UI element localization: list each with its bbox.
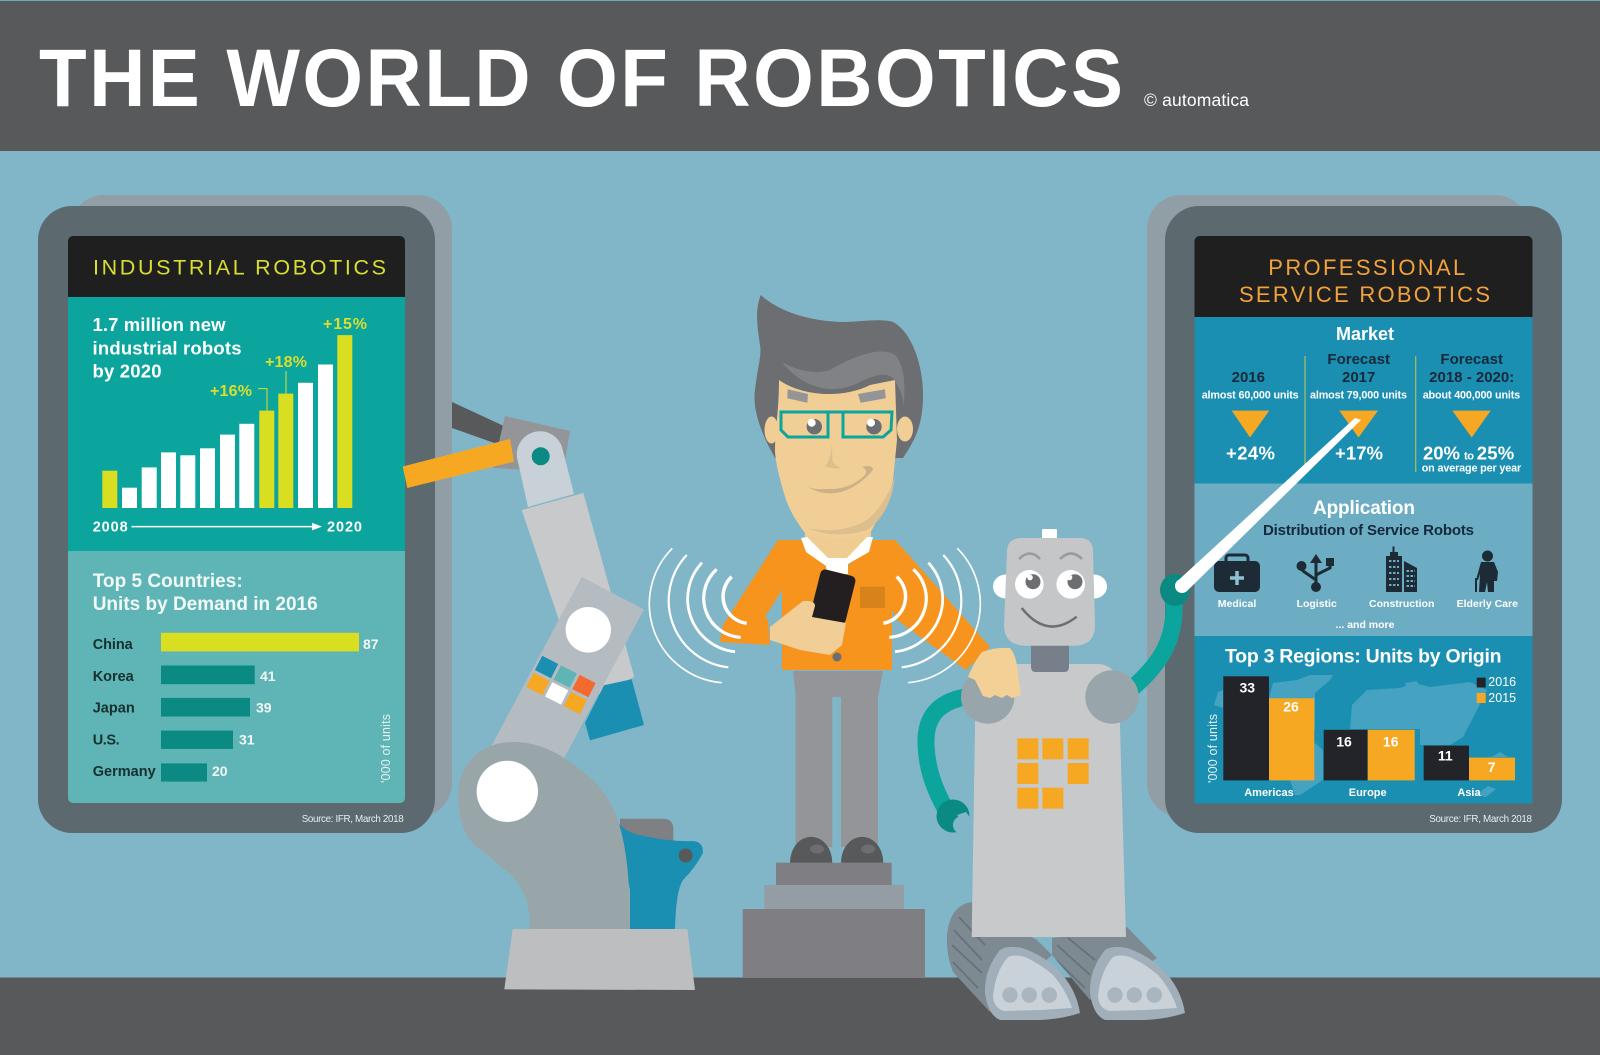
- title: THE WORLD OF ROBOTICS: [39, 32, 1123, 123]
- section: application: ... and more: [1336, 619, 1395, 631]
- section: market: Market: [1336, 324, 1394, 344]
- screen header: [68, 236, 405, 297]
- bar chart: regions: Asia: [1457, 787, 1481, 799]
- bar chart: regions: 7: [1488, 759, 1496, 775]
- right arm: [1130, 600, 1174, 690]
- icon: usb logistic: [1296, 554, 1334, 592]
- section: top 3 regions: Top 3 Regions: Units by Origin: [1225, 646, 1502, 668]
- illustration: industrial robot arm: [403, 402, 703, 990]
- floor band: [0, 978, 1600, 1055]
- shoes: [790, 837, 883, 863]
- section: top 5 countries: Germany: [93, 764, 156, 780]
- bar chart: regions: 33: [1240, 680, 1255, 696]
- section: growth chart: +18%: [265, 354, 307, 371]
- section: market: on average per year: [1422, 462, 1522, 474]
- section: application: Construction: [1369, 598, 1434, 610]
- source note: Source: IFR, March 2018: [1429, 814, 1533, 825]
- legend: [1477, 675, 1516, 705]
- section: application: Medical: [1218, 598, 1256, 610]
- copyright: © automatica: [1144, 90, 1249, 110]
- section: growth chart: by 2020: [92, 360, 162, 382]
- panel: professional service robotics tablet: [1147, 195, 1562, 833]
- neck: [1031, 645, 1069, 672]
- eyes: [807, 419, 882, 434]
- smile: [807, 466, 873, 493]
- ears: [764, 416, 913, 444]
- feet: [985, 947, 1185, 1020]
- icon: medical bag: [1214, 555, 1260, 592]
- signal waves: [649, 548, 980, 683]
- section: market: [1194, 317, 1532, 484]
- screen header: SERVICE ROBOTICS: [1239, 282, 1490, 307]
- section: market: to: [1464, 450, 1474, 462]
- section: market: 25%: [1477, 442, 1514, 464]
- neck: [805, 525, 871, 558]
- phone: [809, 568, 857, 626]
- header band: [0, 0, 1600, 151]
- bar chart: regions: 16: [1336, 733, 1352, 749]
- bar chart: regions: 11: [1438, 748, 1453, 764]
- section: application: Distribution of Service Robots: [1263, 522, 1474, 539]
- section: growth chart: +16%: [210, 383, 252, 400]
- icon: elderly person: [1476, 550, 1498, 592]
- section: market: 2017: [1342, 369, 1375, 386]
- screen header: PROFESSIONAL: [1268, 255, 1465, 280]
- section: top 5 countries: U.S.: [93, 732, 120, 748]
- section: growth chart: 2008: [93, 520, 128, 536]
- hand with phone: [770, 601, 846, 655]
- head: [993, 529, 1107, 646]
- robot eyes: [1015, 570, 1085, 599]
- screen header: INDUSTRIAL ROBOTICS: [93, 256, 386, 280]
- section: market: Forecast: [1327, 351, 1390, 368]
- bar chart: regions: [1223, 676, 1515, 799]
- right hand joint: [1160, 574, 1190, 606]
- trousers: [793, 671, 883, 847]
- panel: industrial robotics tablet: [38, 195, 452, 833]
- section: market: about 400,000 units: [1423, 390, 1520, 402]
- hair highlight: [782, 351, 904, 408]
- face shadow: [808, 477, 895, 535]
- icon: buildings: [1386, 546, 1417, 592]
- section: market: 2018 - 2020:: [1429, 369, 1514, 386]
- man's hand on shoulder: [968, 648, 1021, 698]
- section: top 5 countries: '000 of units: [379, 714, 393, 783]
- section: market: almost 60,000 units: [1202, 390, 1299, 402]
- illustration: service robot: [926, 418, 1361, 1020]
- section: application: [1194, 484, 1532, 636]
- section: top 5 countries: Top 5 Countries:: [93, 571, 243, 592]
- section: top 5 countries: 87: [363, 636, 379, 652]
- hair: [754, 295, 923, 458]
- section: top 5 countries: 20: [212, 763, 228, 779]
- jacket and arms: [720, 540, 990, 670]
- section: top 5 countries: Korea: [93, 669, 135, 685]
- section: top 5 countries: [68, 551, 405, 803]
- bar chart: regions: Europe: [1349, 787, 1387, 799]
- bar chart: regions: 16: [1383, 733, 1399, 749]
- section: growth chart: 2020: [327, 520, 362, 536]
- pointer stick: [1175, 418, 1361, 593]
- world map: [1214, 675, 1508, 797]
- nose: [825, 443, 842, 468]
- screen header: [1194, 236, 1532, 317]
- section: top 5 countries: China: [93, 637, 134, 653]
- torso: [972, 664, 1126, 937]
- section: application: Logistic: [1297, 598, 1337, 610]
- section: market: 20%: [1423, 442, 1460, 464]
- shoulders: [961, 670, 1139, 724]
- legend: 2015: [1488, 691, 1516, 705]
- illustration: pedestal: [743, 863, 925, 978]
- section: growth chart: [68, 297, 405, 551]
- pocket: [860, 587, 885, 608]
- source note: Source: IFR, March 2018: [302, 814, 404, 825]
- section: growth chart: 1.7 million new: [92, 314, 226, 335]
- section: market: Forecast: [1440, 351, 1503, 368]
- jacket button: [832, 652, 842, 662]
- left arm with claw: [926, 697, 975, 834]
- section: market: +17%: [1335, 442, 1383, 464]
- bar chart: regions: 26: [1283, 699, 1299, 715]
- illustration: man with smartphone: [649, 295, 990, 863]
- glasses: [781, 412, 892, 437]
- section: growth chart: +15%: [323, 316, 367, 333]
- tracks: [947, 902, 1157, 1012]
- collar: [801, 537, 873, 574]
- section: top 5 countries: 41: [260, 668, 276, 684]
- section: top 5 countries: 31: [239, 731, 255, 747]
- eyebrows: [787, 389, 886, 403]
- section: top 3 regions: [1194, 636, 1532, 804]
- chest squares: [1017, 738, 1089, 809]
- section: top 3 regions: '000 of units: [1206, 714, 1220, 783]
- face: [775, 380, 897, 538]
- section: growth chart: industrial robots: [92, 338, 242, 358]
- legend: 2016: [1488, 675, 1516, 689]
- section: top 5 countries: Units by Demand in 2016: [93, 594, 318, 615]
- section: market: +24%: [1226, 442, 1275, 464]
- section: market: 2016: [1232, 369, 1265, 386]
- bar chart: regions: Americas: [1244, 787, 1294, 799]
- section: application: Application: [1313, 498, 1415, 519]
- section: market: almost 79,000 units: [1310, 390, 1407, 402]
- section: top 5 countries: Japan: [93, 700, 135, 716]
- section: application: Elderly Care: [1457, 598, 1518, 610]
- section: top 5 countries: 39: [256, 699, 272, 715]
- bar chart: annual supply: [102, 335, 352, 508]
